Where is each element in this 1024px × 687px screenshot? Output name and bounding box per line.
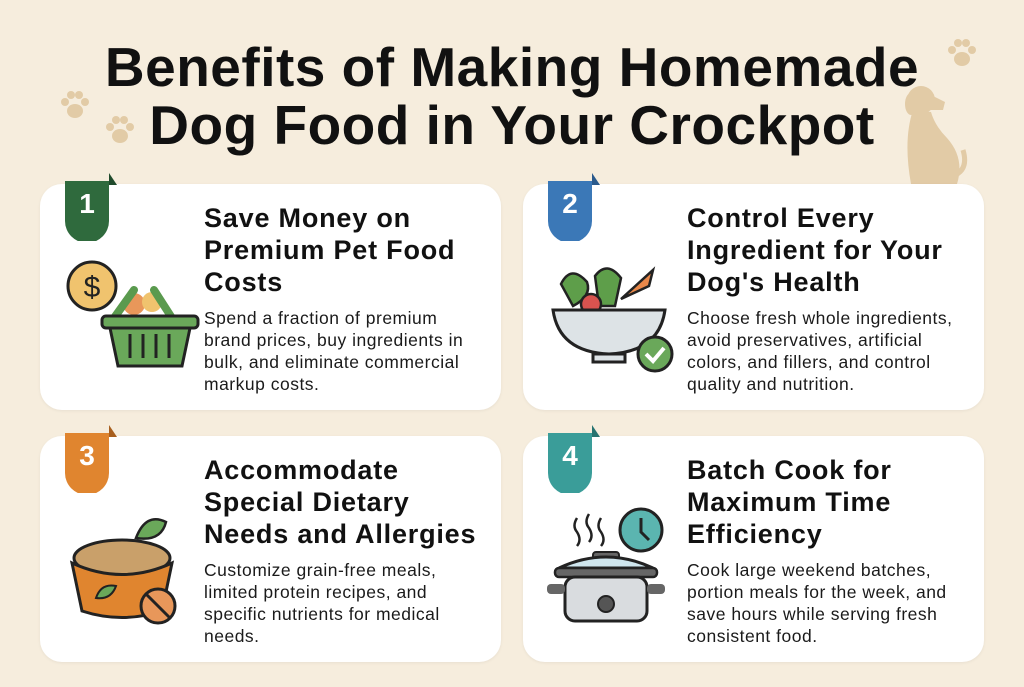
- heading 2: Control Every: [687, 203, 874, 233]
- icon: dog bowl: [70, 518, 176, 624]
- text 4: portion meals for the week, and: [687, 582, 947, 602]
- badge 2: [548, 173, 600, 241]
- text 2: colors, and fillers, and control: [687, 352, 931, 372]
- text 4: consistent food.: [687, 626, 818, 646]
- icon: paw right: [948, 39, 976, 66]
- panel: card 4: [523, 436, 984, 662]
- panel: card 2: [523, 184, 984, 410]
- badge 1: [65, 173, 117, 241]
- text 3: needs.: [204, 626, 260, 646]
- text 4: save hours while serving fresh: [687, 604, 937, 624]
- heading 3: Special Dietary: [204, 487, 410, 517]
- title: Benefits of Making Homemade: [105, 36, 919, 98]
- text 1: Spend a fraction of premium: [204, 308, 437, 328]
- text 3: [204, 560, 440, 646]
- text 1: [204, 308, 463, 394]
- heading 2: Ingredient for Your: [687, 235, 943, 265]
- text 3: specific nutrients for medical: [204, 604, 440, 624]
- panel: card 3: [40, 436, 501, 662]
- icon: paw left 2: [106, 116, 134, 143]
- heading 1: Save Money on: [204, 203, 411, 233]
- text 3: limited protein recipes, and: [204, 582, 427, 602]
- heading 4: Maximum Time: [687, 487, 891, 517]
- icon: money basket: $: [84, 271, 101, 304]
- text 1: markup costs.: [204, 374, 319, 394]
- heading 2: Dog's Health: [687, 267, 861, 297]
- heading 4: Batch Cook for: [687, 455, 892, 485]
- badge 4: [548, 425, 600, 493]
- badge 2: 2: [562, 188, 578, 219]
- icon: money basket: [66, 260, 200, 368]
- badge 3: 3: [79, 440, 95, 471]
- text 1: bulk, and eliminate commercial: [204, 352, 459, 372]
- title: Dog Food in Your Crockpot: [149, 94, 875, 156]
- heading 1: Premium Pet Food: [204, 235, 455, 265]
- heading 4: [687, 455, 892, 549]
- icon: paw left 1: [61, 91, 89, 118]
- heading 3: Accommodate: [204, 455, 399, 485]
- badge 4: 4: [562, 440, 578, 471]
- icon: crockpot with clock: [547, 508, 665, 622]
- panel: card 1: [40, 184, 501, 410]
- text 2: Choose fresh whole ingredients,: [687, 308, 953, 328]
- icon: vegetable bowl: [551, 266, 674, 372]
- icon: dog silhouette: [905, 86, 968, 184]
- text 2: quality and nutrition.: [687, 374, 855, 394]
- heading 4: Efficiency: [687, 519, 823, 549]
- text 2: [687, 308, 953, 394]
- text 2: avoid preservatives, artificial: [687, 330, 922, 350]
- text 3: Customize grain-free meals,: [204, 560, 436, 580]
- title: [105, 36, 919, 156]
- heading 2: [687, 203, 943, 297]
- text 1: brand prices, buy ingredients in: [204, 330, 463, 350]
- heading 1: Costs: [204, 267, 283, 297]
- heading 3: [204, 455, 476, 549]
- text 4: [687, 560, 947, 646]
- badge 1: 1: [79, 188, 95, 219]
- badge 3: [65, 425, 117, 493]
- text 4: Cook large weekend batches,: [687, 560, 931, 580]
- heading 1: [204, 203, 455, 297]
- heading 3: Needs and Allergies: [204, 519, 476, 549]
